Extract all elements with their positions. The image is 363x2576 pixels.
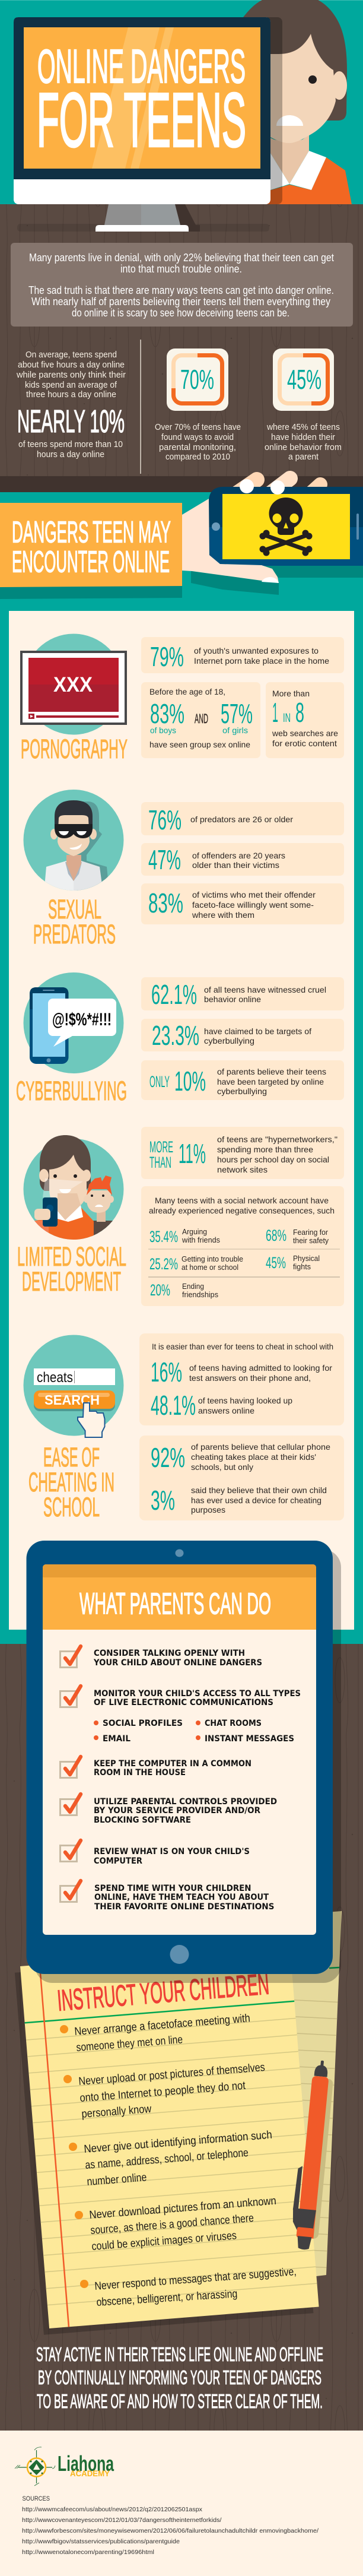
sources: SOURCES [23,2495,50,2502]
wood background lower [0,1644,363,2431]
stat: 76 percent [141,802,344,835]
list: rule five [80,2266,297,2309]
stat: boys and girls [141,682,260,758]
icon: masked predator [24,790,123,893]
heading: sexual predators [33,894,116,949]
stat: only 10 percent: cyberbullying [217,1086,267,1096]
panel: intro: into that much trouble online. [120,263,242,275]
panel: intro [11,243,353,327]
back sheet [292,1911,342,2276]
sources: http://wwwmcafeecom/us/about/news/2012/q2/2012062501aspx [22,2506,203,2513]
stat: 1 in 8: 8 [295,697,304,728]
stat: time online: On average, teens spend [26,350,117,360]
stat card: 70 percent [155,348,241,462]
stat: negative consequences [141,1186,344,1306]
stat card: 70 percent: parental monitoring, [159,443,236,452]
checklist: monitor access: CHAT ROOMS [205,1719,262,1728]
stat: negative consequences: with friends [182,1236,220,1244]
list: rule three: number online [87,2171,147,2188]
section: dangers background [0,476,363,1644]
list: rule five: obscene, belligerent, or harassing [96,2288,238,2309]
panel: cyberbullying: CYBERBULLYING [16,1076,127,1106]
stat: parents beliefs on cheating: 3% [151,1485,175,1516]
stat card: 45 percent: 45% [287,364,321,395]
panel: intro: do online it is scary to see how deceiving teens can be. [72,307,289,319]
stat: boys and girls: Before the age of 18, [149,687,225,696]
stat: cheating with phones: It is easier than ever for teens to cheat in school with [152,1342,333,1351]
sources: http://wwwcovenanteyescom/2012/01/03/7dangersoftheinternetforkids/ [22,2517,222,2524]
stat: 83 percent: of victims who met their offender [192,890,316,899]
checklist: spend time: THEIR FAVORITE ONLINE DESTINATIONS [94,1902,274,1912]
checklist: review computer: COMPUTER [94,1856,142,1866]
tablet shadow [34,1550,341,1983]
list: rule one: someone they met on line [76,2033,183,2054]
stat: parents beliefs on cheating: purposes [191,1505,225,1514]
closing statement [36,2343,323,2412]
stat: negative consequences: Physical [293,1254,320,1263]
stat: cheating with phones: 48.1% [151,1390,196,1421]
stat: 62.1 percent: of all teens have witnessed cruel [204,985,326,994]
stat: negative consequences: Many teens with a social network account have [155,1196,329,1205]
heading: limited social development [17,1241,126,1297]
notepad: instruct your children [14,1911,344,2335]
desk shadow [17,224,269,232]
checklist: talk openly: CONSIDER TALKING OPENLY WITH [94,1649,245,1658]
list: rule four [75,2195,276,2253]
stat: parents beliefs on cheating: has ever used a device for cheating [191,1495,321,1505]
stat: more than 11 percent: MORE [149,1138,173,1156]
icon: search box: cheats [37,1370,73,1386]
panel: intro: With nearly half of parents believing their teens tell them everything they [31,296,330,308]
list: rule four: could be explicit images or viruses [91,2229,237,2253]
list: rule one [60,2012,251,2054]
stat: cheating with phones: test answers on their phone and, [189,1373,311,1383]
stat card: 70 percent: Over 70% of teens have [155,423,241,432]
checklist: spend time: ONLINE, HAVE THEM TEACH YOU ABOUT [94,1893,269,1902]
stat: parents beliefs on cheating: schools, but only [191,1462,253,1472]
list: rule four: Never download pictures from an unknown [89,2195,276,2222]
stat: boys and girls: of boys [150,725,176,735]
icon: skull [260,498,312,556]
stat: time online: three hours a day online [26,390,116,400]
stat: 1 in 8: 1 [272,697,278,728]
list: rule three [69,2129,272,2188]
heading: dangers teen may encounter online [0,503,182,599]
stat: cheating with phones: answers online [198,1406,254,1415]
heading: dangers teen may encounter online: DANGERS TEEN MAY [12,515,171,549]
checklist: monitor access [60,1686,301,1744]
checklist: spend time: SPEND TIME WITH YOUR CHILDREN [94,1884,251,1893]
list: rule four: source, as there is a good chance there [90,2212,254,2237]
stat: 83 percent [141,883,344,924]
sources: http://wwwforbescom/sites/moneywisewomen/2012/06/06/failuretolaunchadultchildr enmovingbackhome/ [22,2527,319,2534]
stat: time online: hours a day online [37,450,104,460]
heading: limited social development: DEVELOPMENT [22,1266,121,1297]
stat: only 10 percent [141,1060,344,1100]
checklist: talk openly [60,1646,262,1668]
footer [0,2431,363,2576]
title [37,40,246,163]
heading: pornography: PORNOGRAPHY [21,734,128,764]
stat: cheating with phones [139,1333,344,1425]
stat: negative consequences: friendships [182,1291,218,1299]
icon: search box [24,1335,123,1437]
stat: 23.3 percent: cyberbullying [204,1036,254,1045]
list: rule five: Never respond to messages that are suggestive, [94,2266,297,2293]
checklist: monitor access: MONITOR YOUR CHILD'S ACCESS TO ALL TYPES [94,1689,301,1699]
icon: search box: SEARCH [44,1392,100,1408]
stat: more than 11 percent: 11% [179,1138,206,1169]
stat: 47 percent: of offenders are 20 years [192,851,285,860]
stat: boys and girls: have seen group sex online [149,740,250,749]
stat card: 45 percent: where 45% of teens [266,423,340,432]
stat: negative consequences: their safety [293,1237,329,1245]
stat card: 45 percent: have hidden their [271,433,335,442]
checklist: parental controls [60,1794,277,1825]
heading: sexual predators: PREDATORS [33,919,116,949]
logo: Liahona Academy [15,2447,114,2486]
list: rule two: Never upload or post pictures of themselves [78,2061,265,2088]
checklist: monitor access: OF LIVE ELECTRONIC COMMUNICATIONS [94,1698,273,1707]
stat: 1 in 8 [266,682,344,758]
list: rule three: Never give out identifying information such [84,2129,272,2156]
panel: sexual predators [24,790,344,949]
stat: time online: about five hours a day online [18,360,125,370]
stat: 23.3 percent: have claimed to be targets of [204,1026,311,1036]
stat: boys and girls: of girls [222,725,248,735]
stat: 47 percent: older than their victims [192,860,279,870]
panel: pornography [21,634,344,764]
stat: negative consequences: Arguing [182,1228,207,1236]
stat: cheating with phones: of teens having admitted to looking for [189,1363,332,1373]
checklist: talk openly: YOUR CHILD ABOUT ONLINE DANGERS [93,1658,262,1668]
stat: 79 percent: of youth's unwanted exposures to [194,646,319,655]
heading: sexual predators: SEXUAL [48,894,101,924]
stat: boys and girls: 57% [221,698,253,729]
sources: http://wwwfbigov/statsservices/publications/parentguide [22,2538,180,2545]
stat: parents beliefs on cheating: 92% [151,1442,185,1473]
sources: http://wwwenotalonecom/parenting/19696html [22,2549,154,2556]
stat: only 10 percent: of parents believe their teens [217,1067,326,1076]
stat: parents beliefs on cheating [139,1436,344,1520]
stat: 62.1 percent: behavior online [204,994,261,1004]
stat: negative consequences: Ending [182,1282,204,1291]
stat: 1 in 8: for erotic content [272,739,337,748]
stat: more than 11 percent: network sites [217,1165,268,1174]
stat: parents beliefs on cheating: cheating takes place at their kids' [191,1452,316,1462]
logo: Liahona Academy: ACADEMY [70,2469,110,2478]
stat: only 10 percent: 10% [174,1066,206,1097]
stat: cheating with phones: of teens having looked up [198,1396,292,1405]
heading: ease of cheating in school [28,1442,114,1522]
stat card: 70 percent: found ways to avoid [161,433,234,442]
stat card: 70 percent: 70% [180,364,214,395]
heading: ease of cheating in school: EASE OF [43,1442,100,1472]
stat: more than 11 percent: spending more than three [217,1145,313,1154]
heading: ease of cheating in school: SCHOOL [43,1492,100,1522]
checklist: parental controls: BY YOUR SERVICE PROVIDER AND/OR [94,1806,260,1815]
stat: time online: of teens spend more than 10 [18,440,123,449]
section: hero [0,0,363,476]
stat: boys and girls: AND [195,711,208,726]
icon: video player: XXX [53,673,93,696]
panel: what parents can do tablet [26,1541,333,1974]
stat: 1 in 8: IN [283,711,291,725]
list: rule three: as name, address, school, or telephone [85,2147,249,2172]
stat: 76 percent: 76% [148,804,182,835]
stat: more than 11 percent: THAN [149,1154,171,1171]
stat: 47 percent [141,843,344,876]
illustration: worried parent [243,0,352,204]
stat: only 10 percent: have been targeted by online [217,1077,324,1086]
stat: 23.3 percent [141,1019,344,1051]
stat: negative consequences: Getting into trouble [182,1255,243,1263]
stat: negative consequences: already experienced negative consequences, such [149,1206,335,1215]
logo: Liahona Academy: Liahona [58,2451,114,2476]
stat: boys and girls: 83% [150,698,184,729]
stat: parents beliefs on cheating: said they believe that their own child [191,1485,327,1495]
checklist: monitor access: EMAIL [103,1734,130,1744]
stat: negative consequences: 20% [150,1281,170,1299]
stat: time online: NEARLY 10% [17,404,125,439]
stat card: 45 percent [265,348,342,462]
checklist: common room: KEEP THE COMPUTER IN A COMMON [94,1759,251,1769]
stat: negative consequences: Fearing for [293,1228,328,1237]
sources [22,2495,319,2556]
monitor stand [95,204,200,232]
stat card: 45 percent: online behavior from [265,443,342,452]
checklist: common room: ROOM IN THE HOUSE [94,1768,186,1777]
stat: 62.1 percent [141,977,344,1010]
stat: 23.3 percent: 23.3% [152,1020,199,1051]
checklist: parental controls: UTILIZE PARENTAL CONTROLS PROVIDED [94,1797,277,1807]
stat card: 70 percent: compared to 2010 [165,452,230,462]
icon: parent and teen [24,1135,123,1241]
stat: only 10 percent: ONLY [149,1073,170,1091]
stat: 62.1 percent: 62.1% [151,979,197,1010]
stat: time online: while parents only think their [16,370,126,380]
stat: time online [16,350,126,460]
stat: 79 percent: 79% [150,641,184,672]
panel: ease of cheating [24,1333,344,1522]
panel: limited social development [17,1127,344,1306]
stat: 47 percent: 47% [148,844,181,875]
checklist: monitor access: INSTANT MESSAGES [205,1734,294,1744]
stat: negative consequences: 45% [266,1254,286,1272]
stat: parents beliefs on cheating: of parents believe that cellular phone [191,1442,330,1452]
stat: negative consequences: fights [293,1263,311,1271]
list: rule one: Never arrange a facetoface meeting with [74,2012,251,2038]
stat: 79 percent: Internet porn take place in the home [194,656,329,666]
checklist: spend time [60,1881,274,1912]
icon: hand holding phone with skull [182,479,363,595]
stat: negative consequences: 25.2% [149,1255,178,1273]
monitor shadow [237,17,282,204]
stat: more than 11 percent: hours per school day on social [217,1155,329,1164]
checklist: review computer: REVIEW WHAT IS ON YOUR CHILD'S [94,1847,250,1856]
stat: more than 11 percent [141,1127,344,1179]
stat: negative consequences: 35.4% [149,1228,178,1246]
heading: limited social development: LIMITED SOCIAL [17,1241,126,1272]
icon: phone with speech bubble: @!$%*#!!! [52,1010,112,1029]
stat card: 45 percent: a parent [288,452,319,462]
heading: ease of cheating in school: CHEATING IN [28,1467,114,1497]
panel: cyberbullying [16,972,344,1106]
stat: 1 in 8: web searches are [272,728,338,738]
stat: 83 percent: faceto-face willingly went some- [192,900,314,910]
checklist: parental controls: BLOCKING SOFTWARE [94,1815,191,1825]
stat: more than 11 percent: of teens are "hypernetworkers," [217,1135,337,1144]
stat: 76 percent: of predators are 26 or older [190,815,293,824]
heading: dangers teen may encounter online: ENCOUNTER ONLINE [12,545,170,578]
front sheet [14,1944,319,2335]
stat: 1 in 8: More than [272,689,310,698]
stat: time online: kids spend an average of [25,381,117,390]
monitor [14,17,270,204]
stat: negative consequences: 68% [266,1227,286,1244]
icon: video player [21,634,126,735]
list: rule two [63,2061,265,2121]
list: rule two: personally know [81,2103,152,2121]
checklist: review computer [60,1840,250,1866]
list: rule two: onto the Internet to people they do not [79,2080,246,2105]
stat: cheating with phones: 16% [151,1357,182,1387]
icon: phone with speech bubble [24,972,123,1073]
checklist: monitor access: SOCIAL PROFILES [103,1719,183,1728]
checklist: common room [60,1757,251,1777]
stat: 79 percent [141,637,344,673]
stat: 83 percent: 83% [148,888,183,918]
stat: 83 percent: where with them [192,910,254,920]
stat: negative consequences: at home or school [182,1263,238,1272]
icon: pen [289,2059,335,2251]
